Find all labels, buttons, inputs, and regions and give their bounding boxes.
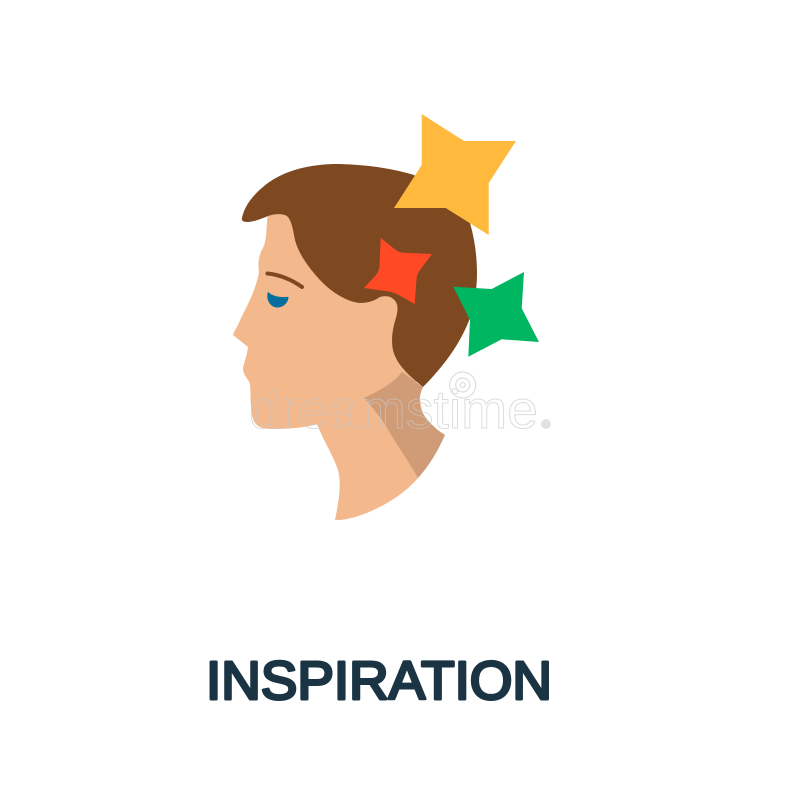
watermark word: dreamstime bbox=[249, 380, 538, 440]
watermark bbox=[249, 372, 551, 440]
face and neck bbox=[233, 208, 424, 520]
red star bbox=[364, 238, 432, 304]
hair bbox=[242, 164, 477, 387]
eye bbox=[267, 292, 288, 308]
yellow star bbox=[394, 114, 516, 235]
title: INSPIRATION bbox=[206, 651, 552, 711]
watermark dot bbox=[541, 419, 551, 429]
icon: head with stars bbox=[233, 114, 539, 520]
neck shadow bbox=[364, 372, 445, 478]
eyebrow bbox=[268, 274, 302, 287]
green star bbox=[453, 272, 539, 357]
watermark spiral logo bbox=[450, 372, 476, 398]
